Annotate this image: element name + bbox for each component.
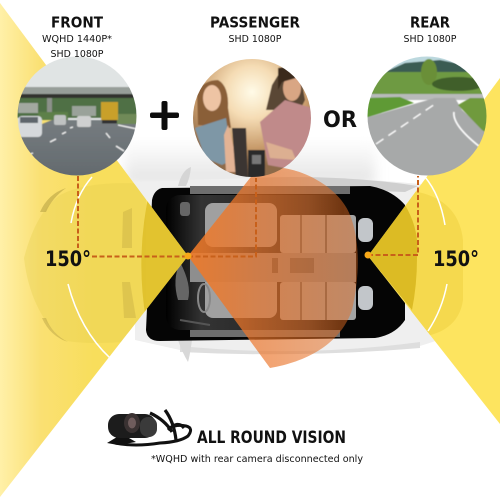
yellow cone: rear camera 150 degrees — [368, 78, 500, 424]
car hood — [24, 183, 146, 343]
rear bench seats — [190, 215, 356, 320]
car body — [135, 167, 470, 362]
icon: lower wing mirror — [178, 340, 192, 362]
door trim bands — [190, 186, 350, 337]
heading: front — [42, 14, 112, 60]
woman — [197, 80, 231, 128]
hood vents — [122, 208, 132, 248]
label: rear angle: 150° — [433, 247, 479, 271]
heading: passenger: SHD 1080P — [228, 34, 282, 45]
heading: rear: REAR — [410, 14, 450, 32]
icon: upper wing mirror — [178, 167, 191, 186]
truck — [101, 102, 118, 120]
orange passenger camera sector — [188, 168, 358, 368]
man — [266, 72, 305, 110]
background shadow behind car — [125, 140, 375, 185]
heading: front: FRONT — [51, 14, 104, 32]
left interior details — [175, 202, 210, 325]
front seats — [205, 203, 277, 318]
rear window wedge — [368, 205, 418, 310]
icon: dash camera — [107, 410, 191, 445]
OR label: OR — [323, 108, 357, 133]
photo: passengers — [190, 58, 315, 180]
heading: passenger: PASSENGER — [210, 14, 300, 32]
car tail — [405, 190, 463, 338]
heading: rear — [404, 14, 456, 45]
photo: rear road — [365, 55, 490, 180]
icon: rear camera point — [364, 252, 372, 258]
heading: front: SHD 1080P — [50, 49, 104, 60]
car cabin interior — [146, 186, 405, 341]
white car lines — [68, 177, 447, 358]
dashed lines: camera angles — [78, 176, 418, 256]
yellow cone: front camera 150 degrees — [0, 3, 188, 497]
icon: front camera point — [184, 252, 192, 260]
tagline: ALL ROUND VISION — [197, 428, 346, 448]
hood edge shading — [40, 188, 66, 212]
heading: rear: SHD 1080P — [404, 34, 456, 45]
console — [248, 150, 265, 180]
cars — [18, 116, 42, 137]
heading: passenger — [210, 14, 300, 45]
windshield overlay — [141, 201, 186, 312]
photo: front road — [15, 55, 140, 180]
label: front angle: 150° — [45, 247, 91, 271]
lane marks — [28, 125, 137, 155]
headrests — [358, 218, 373, 310]
road lines — [454, 112, 480, 147]
heading: front: WQHD 1440P* — [42, 34, 112, 45]
plus sign — [150, 101, 179, 130]
footnote: *WQHD with rear camera disconnected only — [151, 454, 363, 465]
